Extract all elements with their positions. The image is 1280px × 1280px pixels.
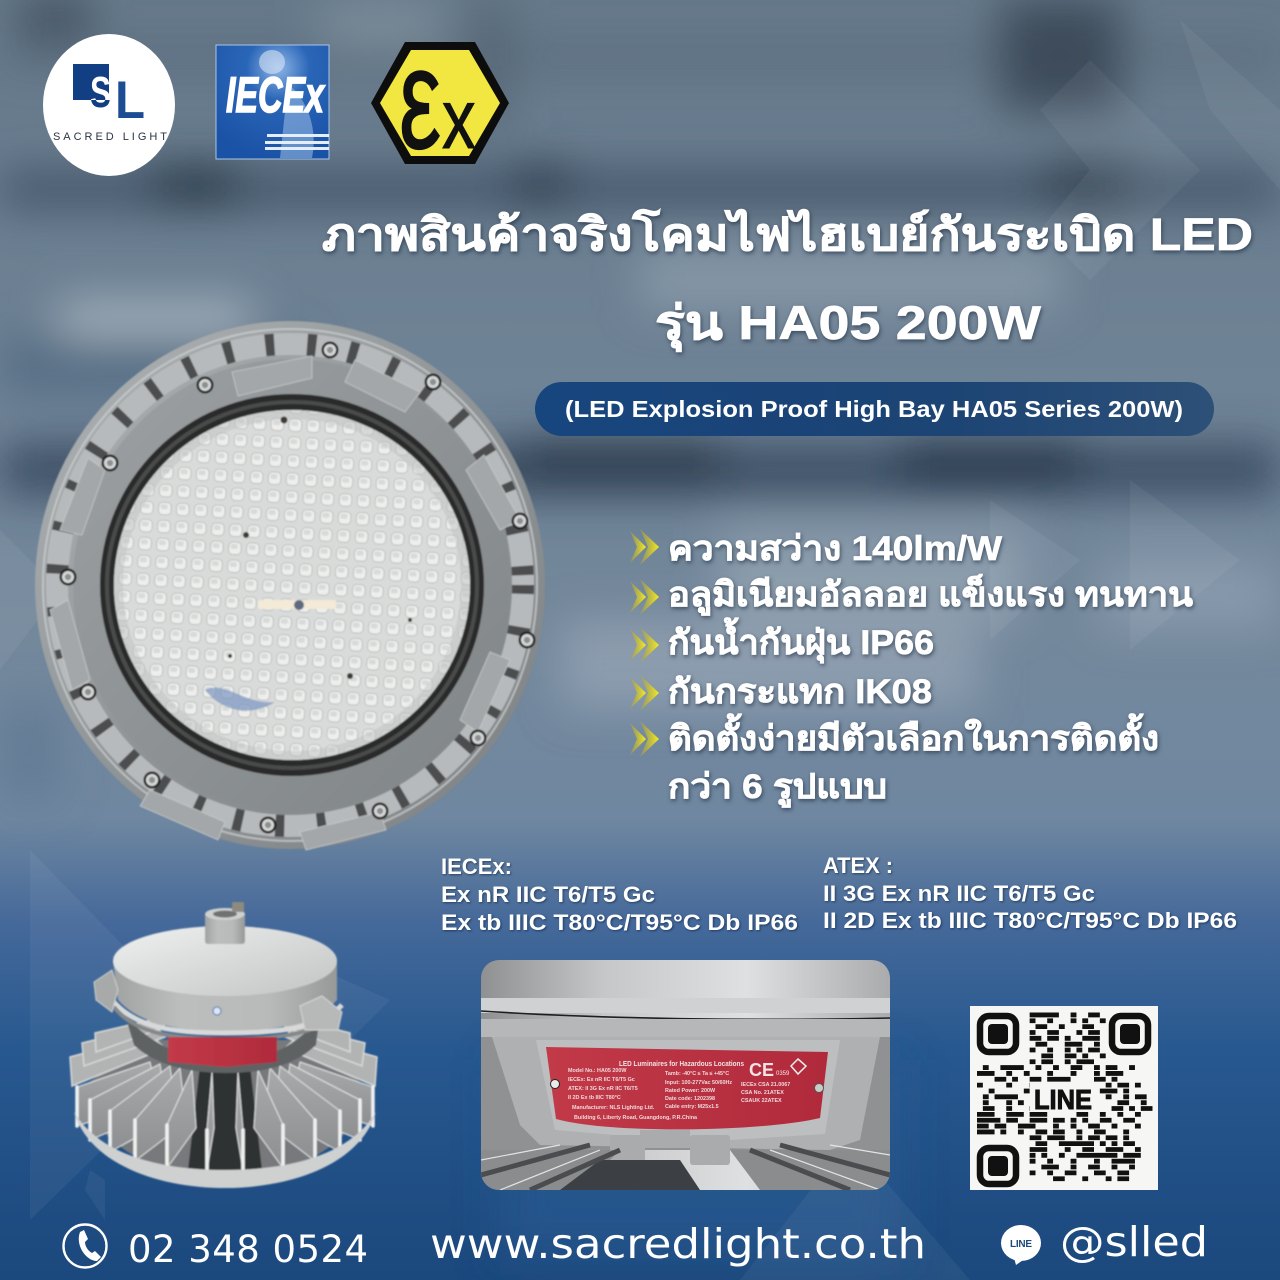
certification: IECEx: [441, 854, 798, 935]
nameplate photo: CSA No. 21ATEX: [741, 1090, 784, 1096]
icon: bullet arrows: [630, 529, 659, 757]
main lamp photo: [35, 321, 545, 850]
feature text: กันกระแทก IK08: [668, 673, 932, 711]
certification: IECEx: IECEx:: [441, 854, 512, 879]
fixture side view photo: [70, 902, 377, 1188]
logo: Sacred Light: S: [90, 68, 111, 117]
nameplate photo: Manufacturer: NLS Lighting Ltd.: [572, 1105, 655, 1111]
nameplate photo: ATEX: II 3G Ex nR IIC T6/T5: [568, 1086, 638, 1092]
QR code: [970, 1006, 1158, 1190]
nameplate photo: Cable entry: M25x1.5: [665, 1104, 719, 1110]
nameplate photo: Date code: 1202398: [665, 1096, 715, 1102]
nameplate photo: Tamb: -40°C ≤ Ta ≤ +45°C: [665, 1071, 729, 1077]
icon: phone: [64, 1224, 106, 1268]
phone number: 02 348 0524: [128, 1228, 368, 1271]
icon: LINE: [1001, 1225, 1041, 1265]
logo: Sacred Light: SACRED LIGHT: [53, 131, 167, 143]
feature text: กว่า 6 รูปแบบ: [668, 768, 887, 808]
logo: IECEx: IECEx: [226, 67, 325, 123]
logo: Sacred Light: [43, 34, 175, 176]
nameplate photo: Model No.: HA05 200W: [568, 1068, 627, 1074]
nameplate photo: Rated Power: 200W: [665, 1088, 716, 1094]
nameplate photo: II 2D Ex tb IIIC T80°C: [568, 1095, 621, 1101]
feature text: ความสว่าง 140lm/W: [668, 530, 1003, 568]
icon: LINE: LINE: [1010, 1239, 1032, 1250]
footer contact bar: [64, 1218, 1208, 1271]
nameplate photo: 0359: [776, 1071, 790, 1077]
nameplate photo: IECEx: Ex nR IIC T6/T5 Gc: [568, 1077, 635, 1083]
QR code: LINE: [1034, 1084, 1092, 1115]
logo: Sacred Light: L: [115, 71, 145, 130]
feature text: กันน้ำกันฝุ่น IP66: [668, 617, 934, 664]
logo: IECEx: [216, 45, 329, 159]
title: รุ่น HA05 200W: [655, 296, 1042, 352]
nameplate photo: CE: [749, 1060, 774, 1080]
website: www.sacredlight.co.th: [430, 1220, 926, 1268]
feature text: อลูมิเนียมอัลลอย แข็งแรง ทนทาน: [668, 573, 1193, 616]
certification: IECEx: Ex nR IIC T6/T5 Gc: [441, 882, 655, 907]
nameplate photo: LED Luminaires for Hazardous Locations: [619, 1059, 744, 1068]
logo: Ex hexagon: ε: [399, 18, 441, 179]
nameplate photo: CSAUK 22ATEX: [741, 1098, 782, 1104]
logo: Ex hexagon: [371, 18, 509, 179]
certification: ATEX: [823, 853, 1237, 933]
logo: Ex hexagon: x: [442, 73, 476, 167]
title: ภาพสินค้าจริงโคมไฟไฮเบย์กันระเบิด LED: [322, 208, 1253, 260]
certification: ATEX: ATEX :: [823, 853, 893, 878]
nameplate photo: Building 6, Liberty Road, Guangdong, P.R.China: [574, 1115, 698, 1121]
title: [322, 208, 1253, 352]
certification: ATEX: II 3G Ex nR IIC T6/T5 Gc: [823, 881, 1095, 906]
lamp body: [94, 902, 342, 1073]
heat sink: [70, 1018, 377, 1188]
certification: IECEx: Ex tb IIIC T80°C/T95°C Db IP66: [441, 910, 798, 935]
subtitle pill: [535, 382, 1214, 436]
logo: Sacred Light: S: [90, 68, 111, 117]
subtitle pill: (LED Explosion Proof High Bay HA05 Series 200W): [565, 396, 1183, 422]
nameplate photo: Input: 100-277Vac 50/60Hz: [665, 1080, 732, 1086]
feature text: [668, 530, 1193, 808]
LINE handle: @slled: [1060, 1218, 1208, 1266]
certification: ATEX: II 2D Ex tb IIIC T80°C/T95°C Db IP66: [823, 908, 1237, 933]
feature text: ติดตั้งง่ายมีตัวเลือกในการติดตั้ง: [668, 713, 1159, 758]
nameplate photo: IECEx CSA 21.0067: [741, 1082, 790, 1088]
feature list: [630, 529, 1193, 808]
nameplate photo: [481, 960, 890, 1190]
